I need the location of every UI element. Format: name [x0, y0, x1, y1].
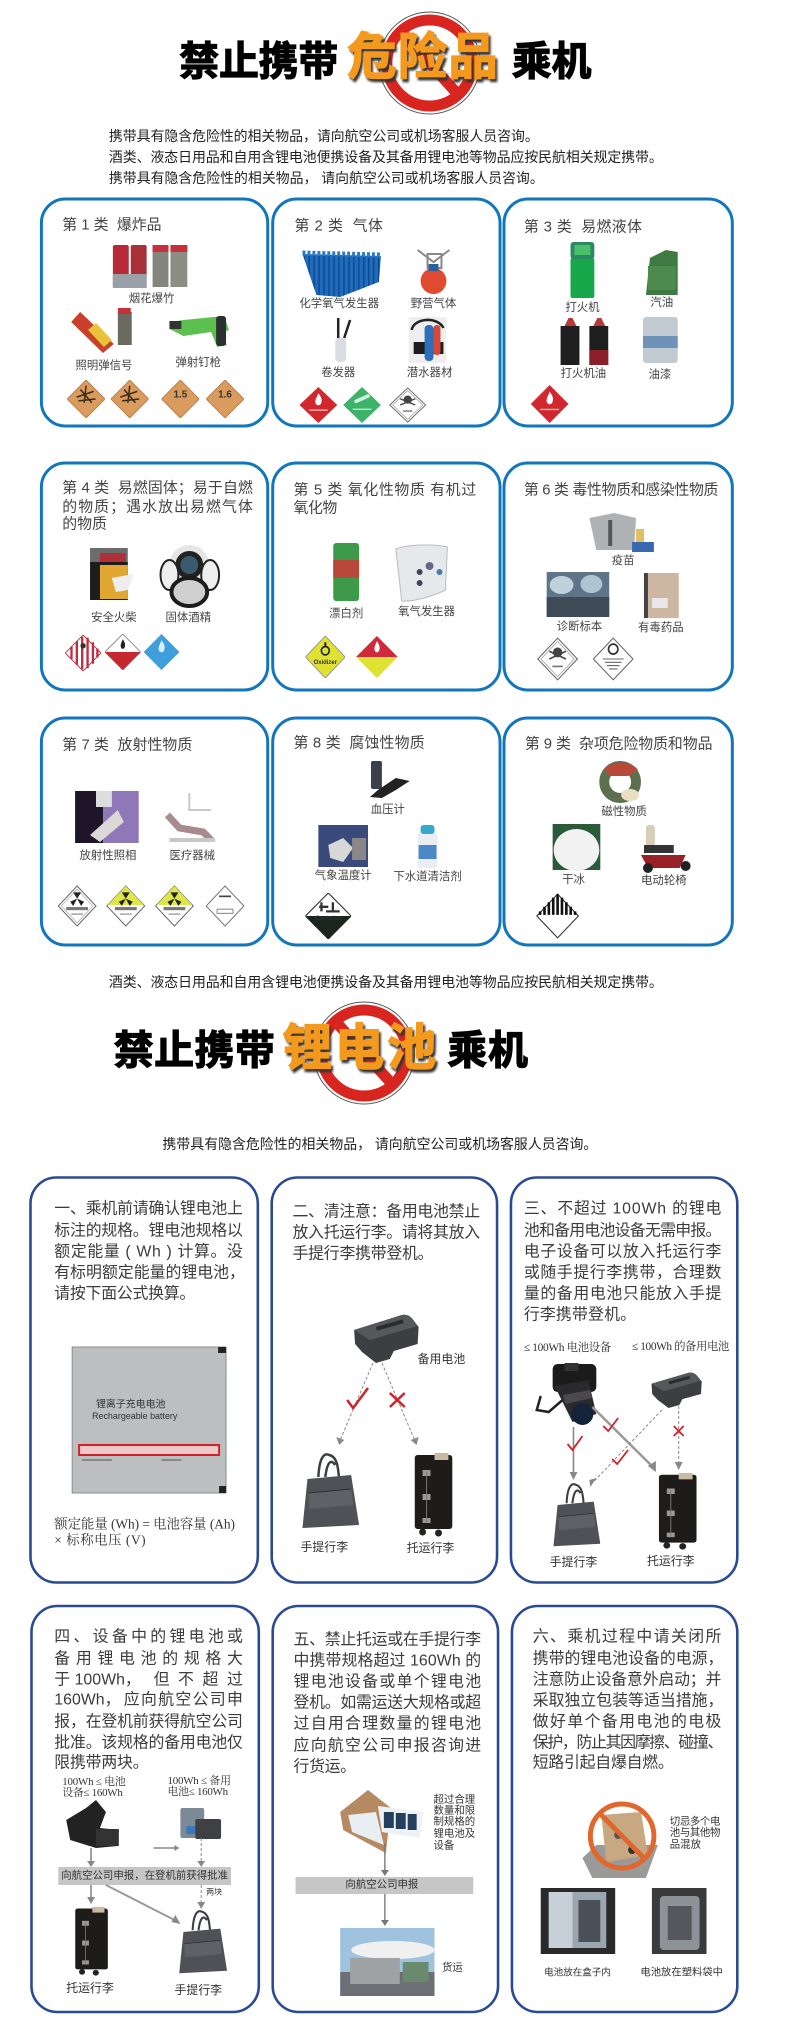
title: no dangerous goods: 乘机 — [512, 40, 591, 84]
hazard label: class 9 — [537, 894, 578, 938]
photo: weather thermometer — [315, 825, 372, 882]
photo: toxic drugs: 有毒药品 — [638, 620, 684, 634]
icon: lighter fluid: 打火机油 — [561, 366, 606, 380]
icon: prohibition sign — [313, 1002, 415, 1104]
hazard labels: explosives: 1.5 — [173, 389, 188, 401]
hazard labels: radioactive — [58, 886, 244, 926]
icon: camping gas: 野营气体 — [411, 296, 457, 310]
labels: under 100Wh: ≤ 100Wh 的备用电池 — [632, 1339, 730, 1353]
icon: hand bag — [174, 1911, 227, 1997]
panel: step 3 under 100Wh: 三、不超过 100Wh 的锂电 — [524, 1199, 721, 1218]
text: formula — [54, 1515, 235, 1548]
icon: jerry can gasoline: 汽油 — [650, 295, 673, 309]
icon: red check — [347, 1388, 368, 1408]
panel: class 7 radioactive: 第 7 类 放射性物质 — [62, 735, 192, 754]
icon: spare battery — [651, 1373, 702, 1408]
title: no dangerous goods: 禁止携带 — [179, 40, 338, 84]
arrows: camera and battery routes — [570, 1406, 683, 1487]
panel: step 4 100 to 160Wh: 限携带两块。 — [54, 1753, 149, 1772]
title: no lithium batteries — [114, 1002, 528, 1104]
icon: red cross — [390, 1393, 405, 1407]
panel: step 6 in-flight safety: 注意防止设备意外启动；并 — [533, 1669, 721, 1689]
icon: fireworks — [113, 245, 187, 305]
icon: electric wheelchair — [641, 825, 691, 887]
icon: bleach can: 漂白剂 — [329, 606, 363, 620]
panel: step 6 in-flight safety: 携带的锂电池设备的电源， — [533, 1649, 723, 1668]
label: do not mix — [670, 1814, 721, 1851]
icon: battery box — [340, 1790, 424, 1853]
panel: step 5 over 160Wh: 行货运。 — [294, 1757, 356, 1776]
panel: step 5 over 160Wh: 五、禁止托运或在手提行李 — [294, 1630, 481, 1649]
panel: step 2 spare batteries: 放入托运行李。请将其放入 — [293, 1223, 480, 1242]
labels: 100 to 160Wh: 100Wh ≤ 电池 — [62, 1774, 126, 1788]
labels: 100 to 160Wh: 100Wh ≤ 备用 — [167, 1774, 231, 1787]
panel: step 3 under 100Wh — [511, 1178, 737, 1582]
title: no lithium batteries: 禁止携带 — [114, 1029, 275, 1073]
panel: class 3 flammable liquids — [504, 199, 732, 426]
panel: step 6 in-flight safety: 采取独立包装等适当措施， — [533, 1691, 723, 1710]
icon: prohibition sign — [379, 12, 480, 114]
label: over-limit batteries: 超过合理 — [434, 1792, 476, 1806]
icon: diving gear — [407, 317, 452, 379]
band: declare to airline: 向航空公司申报，在登机前获得批准 — [61, 1868, 228, 1882]
panel: class 4 flammable solids: 的物质 — [62, 515, 107, 533]
panel: class 5 oxidizers: 氧化物 — [294, 499, 337, 517]
icon: nail gun: 弹射钉枪 — [175, 355, 222, 369]
icon: magnetic materials — [601, 762, 647, 818]
icon: flares: 照明弹信号 — [75, 358, 132, 372]
panel: step 5 over 160Wh: 过自用合理数量的锂电池 — [294, 1714, 481, 1733]
text: carry rules: 酒类、液态日用品和自用含锂电池便携设备及其备用锂电池等物品应按民航相关规定携带。 — [109, 974, 663, 990]
photo: radiography — [75, 791, 139, 862]
icon: medical equipment: 医疗器械 — [170, 848, 216, 862]
intro text block: 携带具有隐含危险性的相关物品，请向航空公司或机场客服人员咨询。 — [109, 128, 539, 144]
icon: checked suitcase — [66, 1907, 114, 1995]
band: declare to airline — [296, 1877, 473, 1894]
panel: step 1 battery rating — [30, 1178, 258, 1582]
icon: solid alcohol — [161, 548, 219, 624]
icon: jerry can gasoline — [646, 250, 678, 309]
panel: step 4 100 to 160Wh: 于 100Wh， — [54, 1671, 141, 1689]
hazard label: flammable liquid — [531, 385, 569, 423]
panel: step 5 over 160Wh: 登机。如需运送大规格或超 — [294, 1693, 481, 1712]
icon: checked suitcase — [407, 1453, 454, 1555]
panel: step 5 over 160Wh: 中携带规格超过 160Wh 的 — [294, 1651, 481, 1670]
icon: bleach can — [329, 543, 363, 620]
panel: step 2 spare batteries — [272, 1178, 497, 1582]
panel: step 4 100 to 160Wh: 160Wh， — [54, 1691, 120, 1709]
label: over-limit batteries: 数量和限 — [434, 1803, 476, 1817]
icon: battery with label: Rechargeable battery — [92, 1411, 178, 1421]
panel: step 1 battery rating: 标注的规格。锂电池规格以 — [54, 1221, 243, 1240]
labels: 100 to 160Wh: 电池≤ 160Wh — [167, 1784, 229, 1798]
text: battery intro: 携带具有隐含危险性的相关物品， 请向航空公司或机场客服人员咨询。 — [163, 1136, 597, 1152]
panel: step 3 under 100Wh: 量的备用电池只能放入手提 — [524, 1284, 721, 1303]
photo: diagnostic specimens: 诊断标本 — [557, 619, 603, 633]
icon: lighter: 打火机 — [565, 300, 600, 314]
icon: hand bag: 手提行李 — [550, 1554, 597, 1569]
panel: class 6 toxic and infectious — [504, 463, 732, 690]
icon: blood pressure meter: 血压计 — [371, 802, 405, 816]
icon: electric wheelchair: 电动轮椅 — [641, 873, 687, 887]
hazard labels: explosives — [67, 380, 244, 418]
icon: video camera — [66, 1800, 119, 1848]
panel: step 3 under 100Wh: 池和备用电池设备无需申报。 — [524, 1221, 721, 1240]
panel: step 6 in-flight safety: 六、乘机过程中请关闭所 — [533, 1627, 721, 1646]
arrows: to luggage — [87, 1885, 222, 1924]
photo: cargo plane — [340, 1928, 435, 1996]
icon: blood pressure meter — [370, 761, 410, 816]
label: do not mix: 池与其他物 — [670, 1825, 720, 1839]
panel: step 2 spare batteries: 二、清注意：备用电池禁止 — [293, 1201, 480, 1221]
label: cargo: 货运 — [442, 1960, 463, 1974]
icon: drain cleaner: 下水道清洁剂 — [393, 869, 462, 883]
labels: under 100Wh — [524, 1339, 730, 1354]
panel: step 2 spare batteries: 手提行李携带登机。 — [293, 1244, 434, 1263]
panel: class 9 miscellaneous — [504, 718, 732, 945]
icon: curling iron: 卷发器 — [321, 365, 356, 379]
icon: spare battery — [354, 1315, 465, 1366]
panel: class 2 gases — [273, 199, 500, 426]
panel: class 5 oxidizers: 第 5 类 氧化性物质 有机过 — [294, 480, 476, 499]
icon: oxygen generator: 氧气发生器 — [398, 604, 456, 618]
photo: diagnostic specimens — [547, 572, 609, 633]
labels: under 100Wh: ≤ 100Wh 电池设备 — [524, 1340, 612, 1354]
panel: step 1 battery rating: 请按下面公式换算。 — [54, 1283, 195, 1303]
icon: safety matches: 安全火柴 — [91, 610, 137, 624]
label: over-limit batteries: 设备 — [434, 1838, 455, 1852]
panel: step 3 under 100Wh: 行李携带登机。 — [524, 1305, 636, 1324]
icon: camping gas — [411, 250, 457, 310]
panel: step 5 over 160Wh: 锂电池设备或单个锂电池 — [294, 1672, 481, 1691]
hazard labels: oxidizers — [305, 636, 398, 678]
panel: step 4 100 to 160Wh — [31, 1606, 259, 2012]
panel: class 9 miscellaneous: 第 9 类 杂项危险物质和物品 — [525, 734, 712, 753]
icon: hand bag — [550, 1484, 600, 1569]
intro text block — [109, 128, 663, 186]
panel: class 4 flammable solids — [41, 463, 268, 690]
panel: step 4 100 to 160Wh: 应向航空公司申 — [124, 1689, 243, 1709]
label: do not mix: 切忌多个电 — [670, 1814, 721, 1828]
hazard label: corrosive: Corrosive — [316, 916, 342, 922]
icon: medical equipment — [167, 793, 216, 862]
icon: checked suitcase: 托运行李 — [647, 1553, 695, 1568]
arrows: to luggage: 两块 — [206, 1886, 222, 1897]
icon: hand bag: 手提行李 — [174, 1982, 222, 1997]
icon: solid alcohol: 固体酒精 — [166, 610, 211, 624]
text: formula: × 标称电压 (V) — [54, 1531, 146, 1548]
label: do not mix: 品混放 — [670, 1837, 702, 1851]
icon: battery and charger — [180, 1808, 221, 1839]
icon: fireworks: 烟花爆竹 — [129, 291, 174, 305]
labels: 100 to 160Wh: 设备≤ 160Wh — [62, 1786, 123, 1799]
panel: step 6 in-flight safety — [512, 1606, 737, 2012]
label: over-limit batteries: 制规格的 — [434, 1814, 475, 1828]
hazard label: corrosive — [305, 893, 351, 939]
hazard labels: toxic — [538, 638, 633, 680]
panel: step 4 100 to 160Wh: 四、设备中的锂电池或 — [54, 1627, 243, 1646]
title: no lithium batteries: 锂电池 — [283, 1020, 436, 1076]
panel: step 3 under 100Wh: 电子设备可以放入托运行李 — [524, 1242, 721, 1261]
panel: step 4 100 to 160Wh: 但不超过 — [154, 1670, 243, 1689]
icon: vaccine kit — [589, 513, 654, 567]
panel: class 2 gases: 第 2 类 气体 — [295, 216, 383, 235]
icon: oxygen cylinders: 化学氧气发生器 — [299, 296, 380, 310]
labels: 100 to 160Wh — [62, 1774, 231, 1799]
arrow: to cargo — [381, 1894, 389, 1926]
band: declare to airline: 向航空公司申报 — [345, 1877, 419, 1891]
icon: paint can: 油漆 — [648, 367, 671, 381]
panel: class 1 explosives — [41, 199, 268, 426]
icon: flares — [71, 308, 132, 372]
icon: curling iron — [321, 318, 356, 379]
label: over-limit batteries — [434, 1792, 476, 1852]
icon: hand bag — [301, 1454, 359, 1554]
icon: vaccine kit: 疫苗 — [612, 553, 635, 567]
title: no dangerous goods — [179, 12, 591, 114]
photo: dry ice — [553, 824, 600, 886]
icon: safety matches — [90, 548, 137, 624]
photo: radiography: 放射性照相 — [79, 848, 136, 862]
panel: step 3 under 100Wh: 或随手提行李携带，合理数 — [524, 1263, 721, 1282]
hazard labels: gases — [300, 387, 426, 423]
icon: oxygen cylinders — [299, 253, 381, 310]
panel: class 8 corrosives — [273, 718, 500, 945]
panel: step 5 over 160Wh — [273, 1606, 498, 2012]
icon: nail gun — [169, 316, 229, 369]
icon: battery with label — [72, 1347, 226, 1493]
photo: battery in plastic bag: 电池放在塑料袋中 — [640, 1965, 723, 1979]
panel: class 5 oxidizers — [273, 463, 500, 690]
photo: dry ice: 干冰 — [562, 873, 585, 886]
icon: checks and cross — [568, 1418, 684, 1464]
icon: lighter — [565, 242, 600, 314]
photo: weather thermometer: 气象温度计 — [315, 868, 372, 882]
panel: step 1 battery rating: 有标明额定能量的锂电池， — [54, 1263, 245, 1282]
icon: no mixed storage — [582, 1804, 658, 1878]
label: over-limit batteries: 锂电池及 — [434, 1826, 476, 1840]
icon: magnetic materials: 磁性物质 — [601, 804, 647, 818]
panel: step 6 in-flight safety: 保护，防止其因摩擦、碰撞、 — [533, 1733, 723, 1752]
panel: class 8 corrosives: 第 8 类 腐蚀性物质 — [294, 733, 425, 752]
icon: diving gear: 潜水器材 — [407, 365, 452, 379]
panel: class 1 explosives: 第 1 类 爆炸品 — [62, 215, 162, 234]
panel: class 4 flammable solids: 第 4 类 易燃固体；易于自燃 — [62, 478, 253, 497]
panel: step 5 over 160Wh: 应向航空公司申报咨询进 — [294, 1735, 481, 1755]
icon: battery with label: 锂离子充电电池 — [96, 1397, 165, 1411]
icon: checked suitcase — [647, 1473, 697, 1568]
icon: spare battery: 备用电池 — [418, 1352, 465, 1366]
icon: checked suitcase: 托运行李 — [407, 1540, 454, 1555]
panel: step 4 100 to 160Wh: 报，在登机前获得航空公司 — [54, 1712, 243, 1731]
title: no dangerous goods: 危险品 — [347, 29, 498, 85]
panel: step 6 in-flight safety: 做好单个备用电池的电极 — [533, 1712, 721, 1731]
photo: toxic drugs — [638, 573, 684, 634]
intro text block: 酒类、液态日用品和自用含锂电池便携设备及其备用锂电池等物品应按民航相关规定携带。 — [109, 149, 663, 165]
hazard labels: explosives: 1.6 — [218, 389, 232, 401]
photo: battery in plastic bag — [640, 1888, 723, 1979]
panel: class 7 radioactive — [41, 718, 268, 945]
icon: drain cleaner — [393, 825, 462, 883]
panel: class 6 toxic and infectious: 第 6 类 毒性物质和感染性物质 — [524, 480, 718, 499]
arrows: allowed and forbidden — [336, 1363, 419, 1445]
icon: paint can — [643, 317, 678, 381]
arrow: to declaration — [381, 1843, 389, 1876]
panel: class 4 flammable solids: 的物质；遇水放出易燃气体 — [62, 497, 253, 516]
panel: step 6 in-flight safety: 短路引起自爆自燃。 — [533, 1752, 674, 1772]
title: no lithium batteries: 乘机 — [447, 1029, 528, 1073]
icon: checked suitcase: 托运行李 — [66, 1980, 114, 1995]
icon: hand bag: 手提行李 — [301, 1539, 348, 1554]
arrows: declare flow — [87, 1838, 205, 1867]
photo: battery in case — [541, 1888, 615, 1979]
hazard labels: oxidizers: Oxidizer — [314, 660, 338, 666]
photo: battery in case: 电池放在盒子内 — [544, 1966, 611, 1979]
panel: step 4 100 to 160Wh: 批准。该规格的备用电池仅 — [54, 1733, 243, 1752]
icon: lighter fluid — [561, 318, 608, 380]
panel: class 3 flammable liquids: 第 3 类 易燃液体 — [524, 217, 642, 236]
hazard labels: flammable solids — [65, 634, 179, 671]
intro text block: 携带具有隐含危险性的相关物品， 请向航空公司或机场客服人员咨询。 — [109, 170, 544, 186]
panel: step 1 battery rating: 额定能量 ( Wh ) 计算。没 — [54, 1241, 243, 1261]
panel: step 4 100 to 160Wh: 备用锂电池的规格大 — [54, 1649, 243, 1668]
panel: step 1 battery rating: 一、乘机前请确认锂电池上 — [54, 1199, 243, 1218]
text: formula: 额定能量 (Wh) = 电池容量 (Ah) — [54, 1515, 235, 1532]
icon: camera — [537, 1363, 596, 1425]
icon: oxygen generator — [396, 545, 456, 618]
band: declare to airline — [58, 1867, 231, 1885]
